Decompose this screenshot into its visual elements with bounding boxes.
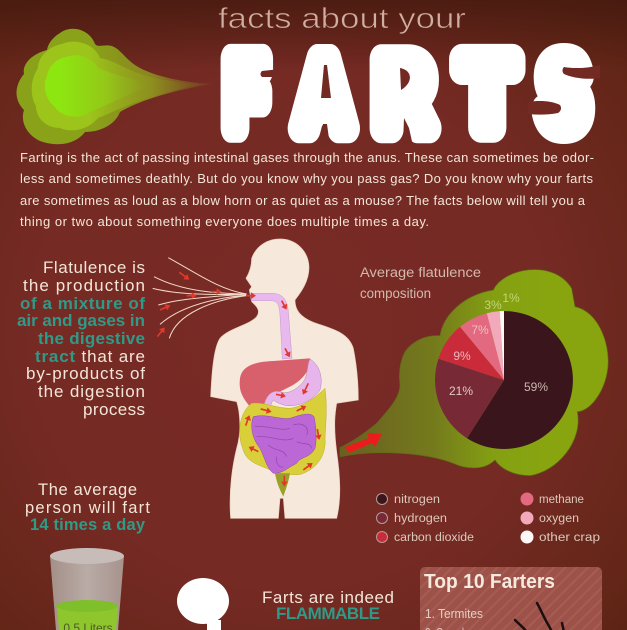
slice: carbon dioxide 9% — [438, 327, 504, 380]
title: FARTS: R — [376, 37, 432, 149]
pie labels: 7% — [471, 323, 489, 337]
legend: other crap: other crap — [539, 532, 600, 544]
FARTS letter counters — [260, 65, 600, 146]
pie chart — [435, 291, 573, 449]
title: FARTS: F — [226, 38, 266, 149]
text block: farts are flammable: FLAMMABLE — [276, 604, 380, 623]
text block: flatulence definition: process — [83, 400, 145, 419]
text block: flatulence definition: tract that are — [35, 347, 145, 366]
legend: hydrogen — [376, 512, 447, 525]
rectum — [275, 473, 290, 497]
intro paragraph: thing or two about something everyone does multiple times a day. — [20, 214, 429, 229]
panel: top 10 farters — [420, 567, 602, 630]
text block: average person: The average — [38, 481, 137, 499]
legend: hydrogen: hydrogen — [394, 513, 447, 525]
stomach — [264, 359, 321, 408]
title: facts about your: facts about your — [218, 3, 466, 35]
text block: average person — [25, 481, 150, 534]
pie labels: 1% — [502, 291, 520, 305]
legend: other crap — [520, 530, 600, 544]
icon: green gas cloud — [16, 29, 212, 144]
legend: methane — [520, 492, 584, 506]
text block: flatulence definition: the digestion — [38, 382, 145, 401]
arrow: gas to cloud — [345, 433, 382, 453]
liver — [240, 358, 310, 407]
legend: nitrogen: nitrogen — [394, 494, 440, 506]
body silhouette — [211, 239, 358, 518]
legend — [376, 492, 600, 544]
digestion flow arrows — [157, 272, 319, 483]
text block: average person: person will fart — [25, 499, 150, 517]
legend: oxygen: oxygen — [539, 513, 579, 525]
legend: carbon dioxide: carbon dioxide — [394, 532, 474, 544]
intro paragraph: are sometimes as loud as a blow horn or as quiet as a mouse? The facts below will tell you a — [20, 193, 586, 208]
gas streams — [153, 258, 247, 338]
slice: other 1% — [500, 311, 504, 380]
pie labels: 21% — [449, 384, 473, 398]
slice: hydrogen 21% — [435, 359, 504, 438]
intro paragraph: less and sometimes deathly. But do you know why you pass gas? Do you know why your farts — [20, 171, 594, 186]
text block: farts are flammable: Farts are indeed — [262, 588, 394, 607]
esophagus — [250, 293, 292, 359]
legend: nitrogen — [376, 494, 440, 506]
title: FARTS — [226, 37, 587, 150]
colon — [240, 388, 326, 475]
list of farters — [425, 606, 483, 630]
pie labels: 3% — [484, 298, 502, 312]
text block: farts are flammable — [262, 588, 394, 623]
heading: average flatulence composition: Average flatulence — [360, 265, 481, 280]
pie labels: 59% — [524, 380, 548, 394]
text block: flatulence definition: air and gases in — [17, 311, 145, 330]
slice: oxygen 3% — [487, 311, 504, 380]
title: FARTS: A — [297, 37, 351, 150]
text block: average person: 14 times a day — [30, 516, 146, 534]
heading: average flatulence composition: composition — [360, 286, 431, 301]
text block: flatulence definition: the production — [23, 276, 145, 295]
text block: flatulence definition — [17, 258, 145, 419]
pie labels — [449, 291, 548, 398]
title: FARTS: S — [540, 38, 587, 150]
legend: oxygen — [520, 512, 579, 525]
text block: flatulence definition: by-products of — [26, 364, 145, 383]
icon: glass of liquid — [50, 548, 124, 630]
panel heading: Top 10 Farters — [424, 571, 555, 593]
diagram: human digestive system — [153, 239, 358, 518]
small intestine — [252, 414, 316, 473]
pie labels: 9% — [453, 349, 471, 363]
icon: white head silhouette — [177, 578, 229, 630]
slice: methane 7% — [460, 313, 504, 380]
intro paragraph — [20, 150, 594, 229]
heading: average flatulence composition — [360, 265, 481, 301]
slice: nitrogen 59% — [467, 311, 573, 449]
text block: flatulence definition: the digestive — [38, 329, 145, 348]
text block: flatulence definition: Flatulence is — [43, 258, 145, 277]
title: FARTS: T — [461, 38, 514, 149]
flatulence cloud — [340, 270, 608, 476]
intro paragraph: Farting is the act of passing intestinal gases through the anus. These can sometimes be odor- — [20, 150, 594, 165]
icon: termite — [515, 603, 564, 630]
text block: flatulence definition: of a mixture of — [20, 294, 145, 313]
legend: methane: methane — [539, 494, 584, 506]
list of farters: 1. Termites — [425, 606, 483, 621]
